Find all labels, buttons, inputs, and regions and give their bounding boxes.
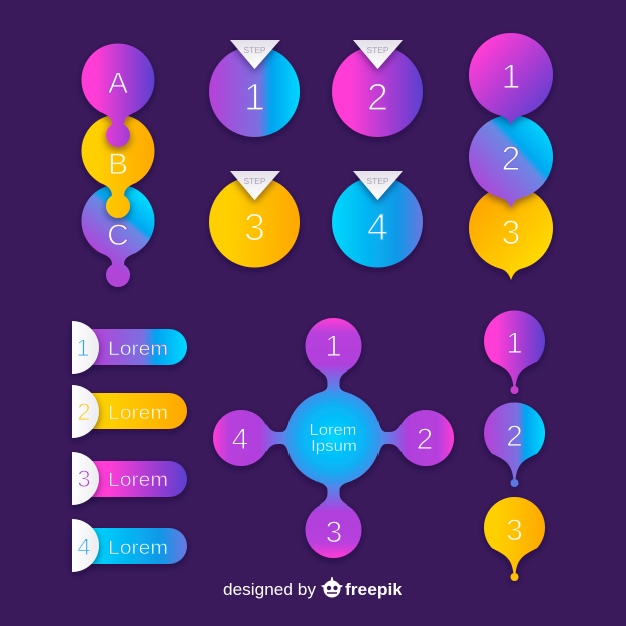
panel: A B C stack [82,43,154,287]
step tag: STEP [244,176,266,186]
node number 1: 1 [325,330,342,363]
node number 4: 4 [232,423,248,456]
panel: step 4 [332,171,423,268]
panel: step 3 [209,171,300,268]
label: Lorem [108,470,168,491]
node 1 [306,318,362,394]
footer credit [223,577,403,599]
node 4 [213,410,289,466]
panel: step 1 [209,40,300,137]
item C [82,184,154,287]
panel: label 4 [72,519,187,572]
number: 2 [77,399,91,426]
bubble 3 [469,186,553,280]
letter A: A [108,67,128,100]
bubble 2 [469,115,553,208]
footer credit: designed by [223,581,317,599]
step tag: STEP [244,45,266,55]
number: 1 [506,327,523,360]
number 3: 3 [244,207,265,249]
number: 4 [77,534,91,561]
hub text: Lorem [310,422,356,439]
number: 3 [506,514,523,547]
number: 3 [77,466,91,493]
node number 3: 3 [326,516,342,549]
panel: label 1 [72,321,187,374]
hub text [310,422,357,455]
panel: label 2 [72,385,187,438]
bubble 1 [469,33,553,125]
hub text: Ipsum [311,438,357,455]
item B [82,114,154,218]
label: Lorem [108,538,168,559]
number: 2 [506,420,523,453]
node 3 [306,481,362,558]
pin 2 [484,403,545,487]
panel: step 2 [332,40,423,137]
item A [82,43,154,147]
number 2: 2 [502,140,520,178]
pin 1 [484,311,545,394]
letter B: B [108,148,128,181]
step tag: STEP [366,45,389,55]
panel: speech bubble stack [469,33,553,280]
panel: hub diagram [213,318,454,558]
footer credit: freepik [345,580,403,599]
node number 2: 2 [417,423,433,456]
label: Lorem [108,403,168,424]
step tag: STEP [366,176,389,186]
number 1: 1 [502,58,520,96]
number 4: 4 [367,207,388,249]
number: 1 [76,335,90,362]
panel: label 3 [72,452,187,505]
letter C: C [107,219,129,252]
node 2 [378,410,454,466]
pin 3 [484,497,545,581]
number 2: 2 [367,77,388,119]
icon: freepik mascot [322,577,342,598]
label: Lorem [108,339,168,360]
hub circle [286,390,380,484]
number 3: 3 [502,214,520,252]
number 1: 1 [244,77,265,119]
